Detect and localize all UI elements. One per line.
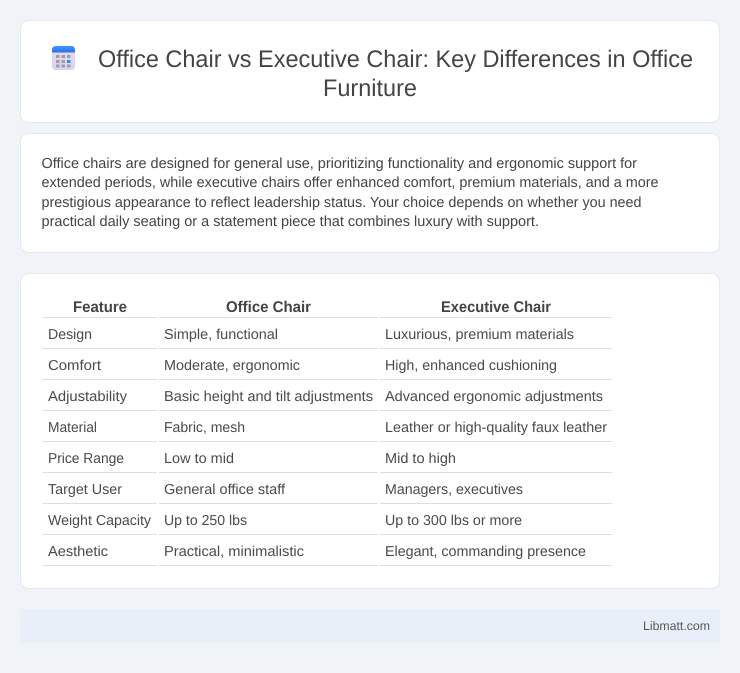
row: material: Material (48, 420, 97, 436)
row: comfort: Moderate, ergonomic (164, 358, 300, 374)
row: target user: General office staff (164, 482, 286, 498)
text block: introduction: prestigious appearance to reflect leadership status. Your choice depends on whether you need (42, 195, 642, 211)
table header: Executive Chair (441, 299, 551, 316)
row: comfort: High, enhanced cushioning (385, 358, 557, 374)
title (98, 46, 693, 102)
row: price range: Mid to high (385, 451, 456, 467)
row: target user: Target User (48, 482, 122, 498)
row: material (48, 420, 607, 436)
row: material: Leather or high-quality faux leather (385, 420, 607, 436)
row: design (48, 327, 574, 343)
row: target user (48, 482, 523, 498)
row: adjustability: Advanced ergonomic adjustments (385, 389, 603, 405)
row: aesthetic (48, 544, 586, 560)
text block: introduction: Office chairs are designed for general use, prioritizing functionality and ergonomic support for (42, 156, 637, 172)
row: design: Design (48, 327, 92, 343)
row: price range: Low to mid (164, 451, 234, 467)
row: aesthetic: Elegant, commanding presence (385, 544, 586, 560)
row: design: Simple, functional (164, 327, 278, 343)
row: target user: Managers, executives (385, 482, 523, 498)
row: adjustability (48, 389, 603, 405)
row: material: Fabric, mesh (164, 420, 245, 436)
title: Furniture (323, 75, 417, 102)
text block: introduction: practical daily seating or a statement piece that combines luxury with support. (42, 214, 539, 230)
title: Office Chair vs Executive Chair: Key Differences in Office (98, 46, 693, 73)
row: weight capacity (48, 513, 522, 529)
text block: introduction (42, 156, 658, 230)
row: adjustability: Basic height and tilt adjustments (164, 389, 373, 405)
row: adjustability: Adjustability (48, 389, 128, 405)
table header: Feature (73, 299, 127, 316)
row: weight capacity: Weight Capacity (48, 513, 152, 529)
row: aesthetic: Aesthetic (48, 544, 108, 560)
icon: calendar (52, 46, 75, 70)
footer credit: Libmatt.com (643, 619, 710, 633)
row: price range (48, 451, 456, 467)
row: weight capacity: Up to 300 lbs or more (385, 513, 522, 529)
row: design: Luxurious, premium materials (385, 327, 574, 343)
panel: title card (20, 20, 720, 122)
row: aesthetic: Practical, minimalistic (164, 544, 304, 560)
row: price range: Price Range (48, 451, 124, 467)
panel: introduction (20, 134, 720, 252)
row: weight capacity: Up to 250 lbs (164, 513, 247, 529)
row: comfort (48, 358, 557, 374)
row: comfort: Comfort (48, 358, 101, 374)
table header: Office Chair (226, 299, 311, 316)
table header (73, 299, 551, 316)
panel: comparison table (20, 274, 720, 588)
footer (20, 609, 720, 643)
text block: introduction: extended periods, while executive chairs offer enhanced comfort, premium materials, and a more (42, 175, 658, 191)
